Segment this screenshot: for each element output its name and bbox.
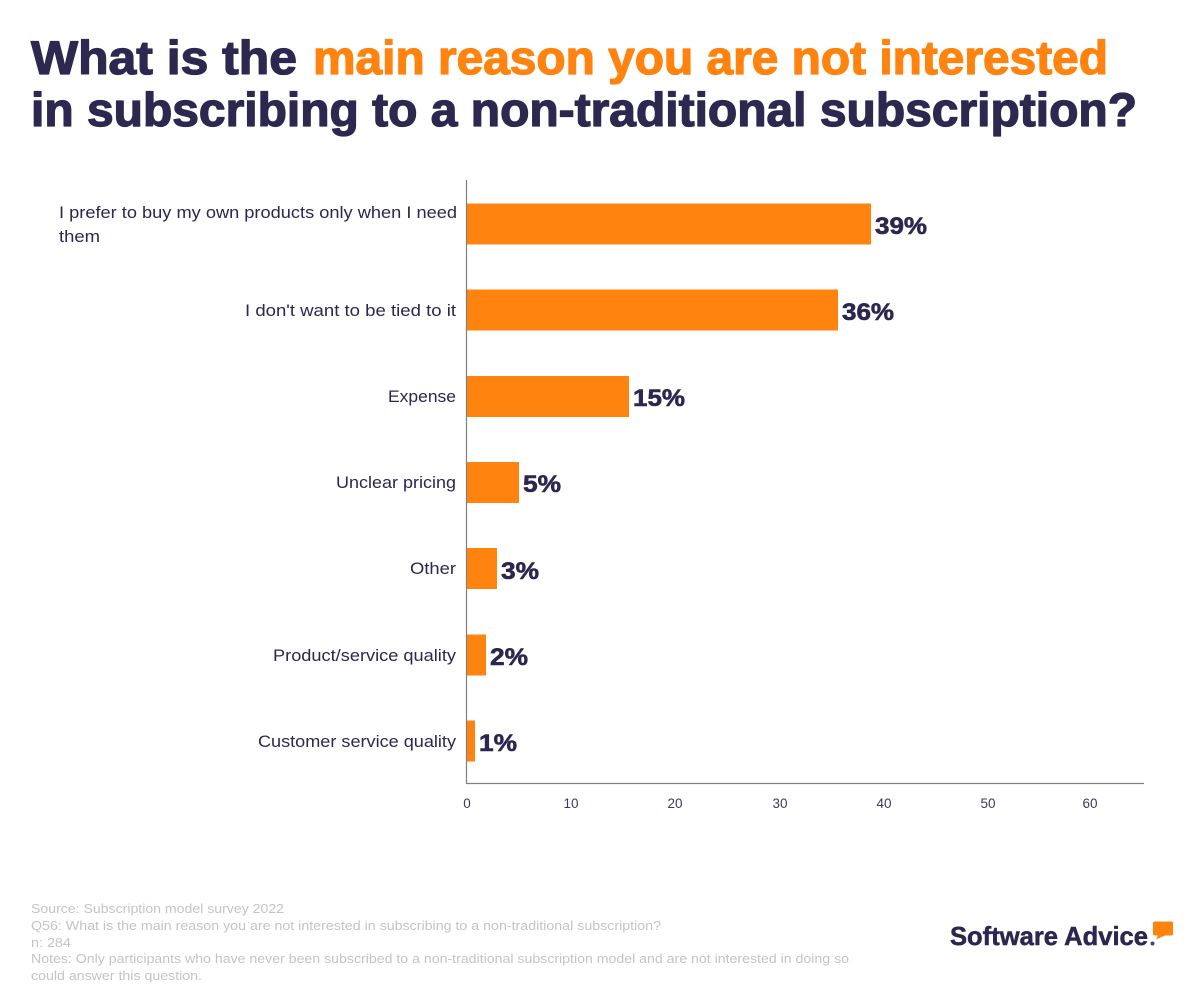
- value labels: [479, 213, 927, 757]
- value labels: 2%: [490, 644, 528, 671]
- icon: speech bubble: [1153, 922, 1173, 940]
- axis tick labels: [463, 796, 1098, 811]
- title: [31, 31, 1137, 136]
- source notes: n: 284: [31, 935, 71, 950]
- axis tick labels: 50: [980, 796, 996, 811]
- logo: Software Advice: Software Advice: [950, 921, 1148, 951]
- category labels: [59, 203, 457, 751]
- category labels: Other: [410, 559, 456, 578]
- category labels: them: [59, 227, 100, 246]
- title: main reason you are not interested: [313, 31, 1108, 84]
- axis tick labels: 0: [463, 796, 471, 811]
- value labels: 15%: [633, 385, 685, 412]
- value labels: 5%: [523, 471, 561, 498]
- title: in subscribing to a non-traditional subscription?: [31, 83, 1137, 136]
- category labels: Customer service quality: [258, 732, 457, 751]
- axis tick labels: 60: [1082, 796, 1098, 811]
- value labels: 3%: [501, 558, 539, 585]
- bar chart: [59, 180, 1144, 811]
- category labels: Product/service quality: [273, 646, 457, 665]
- bars: [467, 204, 871, 762]
- source notes: Source: Subscription model survey 2022: [31, 901, 284, 916]
- axis tick labels: 40: [876, 796, 892, 811]
- value labels: 39%: [875, 213, 927, 240]
- category labels: Unclear pricing: [336, 473, 456, 492]
- axes: [466, 180, 1144, 784]
- source notes: Notes: Only participants who have never been subscribed to a non-traditional subscription model and are not interested in doing so: [31, 951, 849, 966]
- source notes: could answer this question.: [31, 968, 202, 983]
- value labels: 1%: [479, 730, 517, 757]
- axis tick labels: 30: [772, 796, 788, 811]
- source notes: [31, 901, 849, 983]
- source notes: Q56: What is the main reason you are not interested in subscribing to a non-traditional subscription?: [31, 918, 661, 933]
- category labels: Expense: [388, 387, 456, 406]
- value labels: 36%: [842, 299, 894, 326]
- title: What is the: [31, 31, 297, 84]
- axis tick labels: 10: [563, 796, 579, 811]
- category labels: I prefer to buy my own products only when I need: [59, 203, 457, 222]
- category labels: I don't want to be tied to it: [245, 301, 456, 320]
- axis tick labels: 20: [667, 796, 683, 811]
